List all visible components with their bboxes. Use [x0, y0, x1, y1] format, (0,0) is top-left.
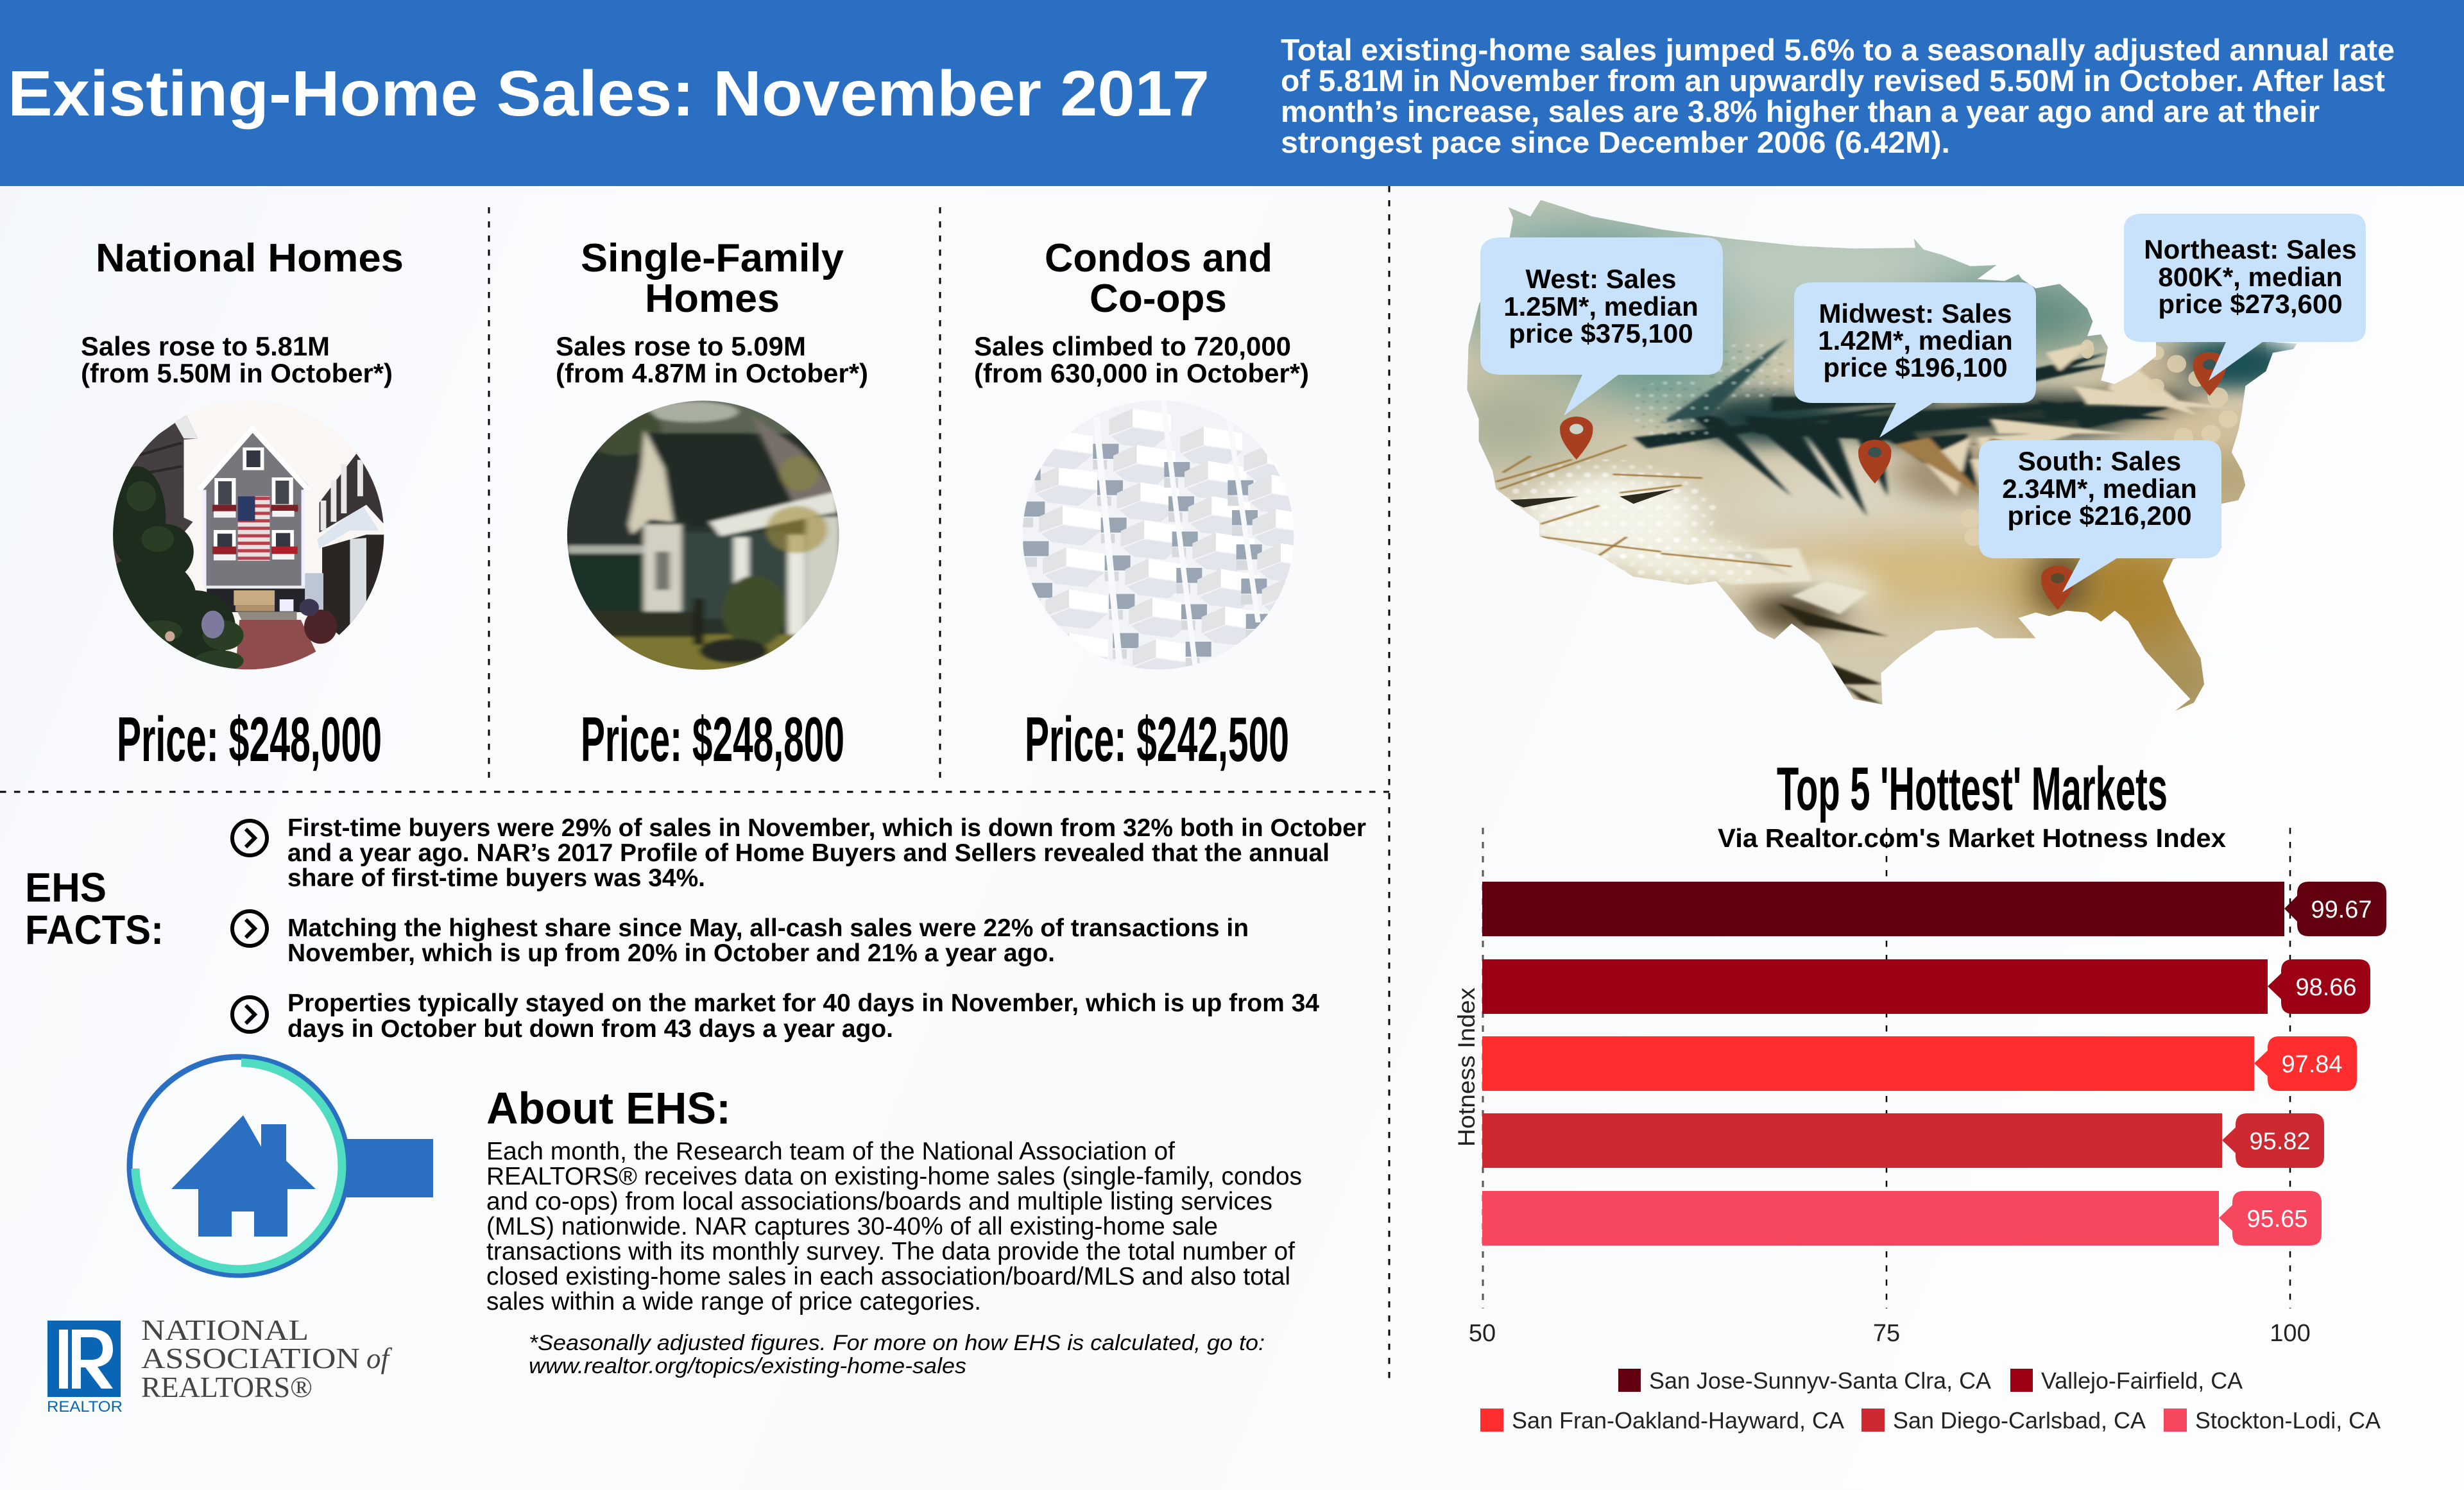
- bar: stockton: 95.65: [2246, 1206, 2308, 1233]
- fact: all-cash sales: November, which is up from 20% in October and 21% a year ago.: [287, 939, 1055, 967]
- callout: northeast: [2124, 214, 2366, 381]
- callout: west: [1480, 237, 1723, 416]
- logo: national association of realtors: of: [366, 1342, 393, 1374]
- header summary: [1281, 33, 2395, 159]
- photo: condo building: [1023, 400, 1294, 670]
- callout: south: 2.34M*, median: [2002, 474, 2197, 504]
- logo: national association of realtors: REALTORS®: [141, 1371, 312, 1403]
- fact: first-time buyers: share of first-time buyers was 34%.: [287, 864, 705, 892]
- national sales text: Sales rose to 5.81M: [81, 331, 330, 361]
- heading: national homes: National Homes: [96, 236, 404, 280]
- title: Existing-Home Sales: November 2017: [8, 58, 1210, 130]
- panel: single-family homes: [556, 236, 868, 775]
- heading: single-family homes: Homes: [645, 277, 780, 321]
- pin: midwest: [1858, 440, 1891, 484]
- panel: about ehs: [486, 1083, 1302, 1378]
- callout: south: [1979, 440, 2221, 592]
- heading: single-family homes: [581, 236, 844, 321]
- chart title: Top 5 'Hottest' Markets: [1777, 755, 2168, 823]
- pin: northeast: [2193, 352, 2226, 396]
- about text: Each month, the Research team of the National Association of: [486, 1138, 1175, 1165]
- heading: condos and co-ops: Condos and: [1045, 236, 1272, 280]
- bar: san jose: [1482, 882, 2386, 936]
- callout: south: South: Sales: [2018, 446, 2181, 476]
- bar: vallejo: 98.66: [2295, 974, 2357, 1001]
- single-family sales text: [556, 331, 868, 388]
- about text: (MLS) nationwide. NAR captures 30-40% of all existing-home sale: [486, 1213, 1218, 1240]
- header summary: strongest pace since December 2006 (6.42M).: [1281, 125, 1950, 159]
- axis title: Hotness Index: [1453, 987, 1480, 1147]
- map: photo-filled usa silhouette: [1448, 194, 2300, 728]
- callout: midwest: [1794, 282, 2036, 438]
- footnote: www.realtor.org/topics/existing-home-sales: [529, 1354, 966, 1378]
- condos sales text: [974, 331, 1309, 388]
- panel: ehs facts: [25, 814, 1366, 1043]
- heading: single-family homes: Single-Family: [581, 236, 844, 280]
- heading: ehs facts: EHS: [25, 864, 107, 911]
- footnote: [529, 1331, 1265, 1378]
- single-family sales text: (from 4.87M in October*): [556, 358, 868, 388]
- chart subtitle: Via Realtor.com's Market Hotness Index: [1718, 823, 2226, 853]
- x axis labels: 50: [1469, 1320, 1496, 1347]
- about text: transactions with its monthly survey. The data provide the total number of: [486, 1238, 1295, 1265]
- heading: about ehs: About EHS:: [486, 1083, 731, 1133]
- header summary: month’s increase, sales are 3.8% higher than a year ago and are at their: [1281, 94, 2320, 128]
- legend: Vallejo-Fairfield, CA: [2041, 1367, 2243, 1394]
- condos price: Price: $242,500: [1025, 704, 1289, 775]
- fact: all-cash sales: Matching the highest share since May, all-cash sales were 22% of transactions in: [287, 914, 1249, 942]
- feather barbs: [1634, 338, 2232, 705]
- bar: san jose: 99.67: [2311, 896, 2372, 923]
- golden stalks: [1496, 445, 1792, 567]
- single-family price: Price: $248,800: [581, 704, 844, 775]
- header summary: of 5.81M in November from an upwardly revised 5.50M in October. After last: [1281, 64, 2385, 98]
- pin: west: [1560, 416, 1593, 459]
- header summary: Total existing-home sales jumped 5.6% to a seasonally adjusted annual rate: [1281, 33, 2395, 67]
- heading: condos and co-ops: [1045, 236, 1272, 321]
- callout: northeast: 800K*, median: [2158, 262, 2343, 292]
- logo: national association of realtors: [47, 1314, 393, 1416]
- heading: ehs facts: FACTS:: [25, 907, 164, 953]
- logo: national association of realtors: ASSOCIATION: [141, 1342, 360, 1374]
- bar: san francisco: [1482, 1036, 2357, 1091]
- national sales text: (from 5.50M in October*): [81, 358, 393, 388]
- legend: Stockton-Lodi, CA: [2195, 1407, 2381, 1434]
- callout: west: 1.25M*, median: [1503, 291, 1698, 321]
- logo: national association of realtors: REALTOR: [47, 1398, 123, 1416]
- callout: northeast: price $273,600: [2158, 289, 2343, 319]
- callout: midwest: price $196,100: [1823, 352, 2008, 382]
- fact: days on market: Properties typically stayed on the market for 40 days in November, which is up from 34: [287, 989, 1320, 1017]
- icon: chevron bullet 2: [232, 911, 267, 946]
- callout: west: West: Sales: [1526, 264, 1676, 294]
- about text: and co-ops) from local associations/boards and multiple listing services: [486, 1188, 1272, 1215]
- pin: south: [2041, 566, 2074, 610]
- fact: all-cash sales: [287, 914, 1249, 967]
- callout: west: price $375,100: [1509, 318, 1693, 348]
- condos sales text: Sales climbed to 720,000: [974, 331, 1291, 361]
- about text: closed existing-home sales in each association/board/MLS and also total: [486, 1263, 1290, 1290]
- fact: first-time buyers: and a year ago. NAR’s 2017 Profile of Home Buyers and Sellers revealed that the annual: [287, 839, 1330, 867]
- x axis labels: 100: [2270, 1320, 2311, 1347]
- callout: midwest: Midwest: Sales: [1818, 298, 2012, 329]
- panel: condos and co-ops: [974, 236, 1324, 775]
- heading: ehs facts: [25, 864, 164, 953]
- single-family sales text: Sales rose to 5.09M: [556, 331, 806, 361]
- panel: national homes: [81, 236, 407, 775]
- bar: san diego: 95.82: [2249, 1128, 2311, 1155]
- legend: San Diego-Carlsbad, CA: [1893, 1407, 2146, 1434]
- condos sales text: (from 630,000 in October*): [974, 358, 1309, 388]
- about text: [486, 1138, 1302, 1315]
- national sales text: [81, 331, 393, 388]
- photo: suburban house: [558, 394, 846, 676]
- fact: days on market: days in October but down from 43 days a year ago.: [287, 1015, 893, 1043]
- x axis labels: 75: [1873, 1320, 1900, 1347]
- legend: [1480, 1367, 2381, 1434]
- bokeh and dew: [1961, 339, 2237, 546]
- footnote: *Seasonally adjusted figures. For more on how EHS is calculated, go to:: [529, 1331, 1265, 1355]
- icon: chevron bullet 1: [232, 821, 267, 855]
- heading: condos and co-ops: Co-ops: [1090, 277, 1227, 321]
- bar: san francisco: 97.84: [2281, 1051, 2343, 1078]
- callout: south: price $216,200: [2007, 501, 2192, 531]
- fact: days on market: [287, 989, 1320, 1043]
- icon: chevron bullet 3: [232, 997, 267, 1032]
- bar: vallejo: [1482, 959, 2370, 1014]
- about text: sales within a wide range of price categories.: [486, 1288, 981, 1315]
- panel: top 5 hottest markets chart: [1453, 755, 2386, 1434]
- fact: first-time buyers: [287, 814, 1366, 892]
- national price: Price: $248,000: [117, 704, 382, 775]
- photo: house with flag: [113, 400, 384, 670]
- legend: San Fran-Oakland-Hayward, CA: [1512, 1407, 1844, 1434]
- legend: San Jose-Sunnyv-Santa Clra, CA: [1649, 1367, 1991, 1394]
- logo: national association of realtors: NATIONAL: [141, 1314, 309, 1346]
- x axis labels: [1469, 1320, 2311, 1347]
- callout: northeast: Northeast: Sales: [2144, 234, 2357, 264]
- about text: REALTORS® receives data on existing-home sales (single-family, condos: [486, 1163, 1302, 1190]
- callout: midwest: 1.42M*, median: [1818, 325, 2013, 355]
- bar: san diego: [1482, 1113, 2324, 1168]
- bar: stockton: [1482, 1191, 2322, 1246]
- us map with regional callouts: [1448, 194, 2366, 728]
- icon: house in ring: [130, 1057, 433, 1275]
- fact: first-time buyers: First-time buyers were 29% of sales in November, which is down from 32% both in October: [287, 814, 1366, 842]
- header banner: [0, 0, 2464, 186]
